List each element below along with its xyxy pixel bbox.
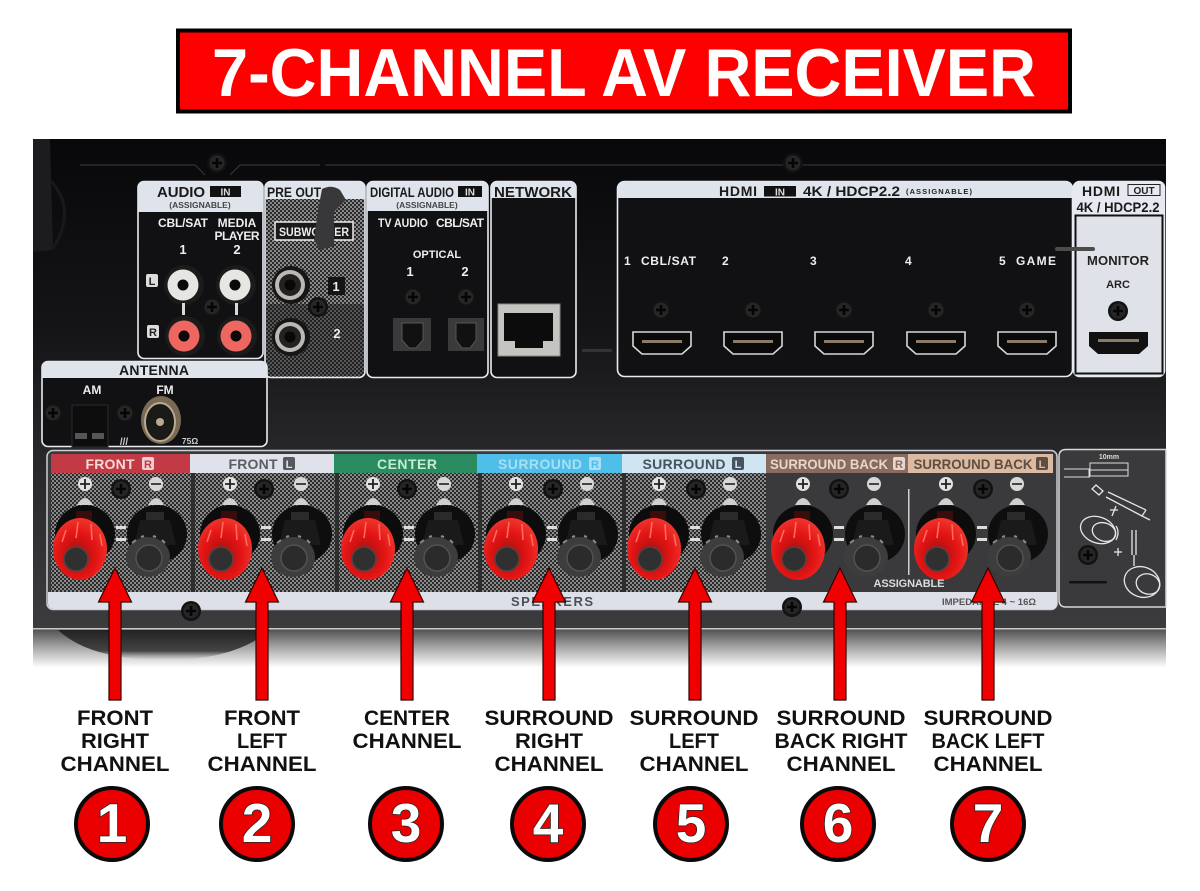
label: surround back right channel: BACK RIGHT	[774, 730, 908, 753]
badge 7: 7	[973, 792, 1003, 854]
HDMI output port	[1089, 301, 1148, 354]
heading: digital audio: (ASSIGNABLE)	[396, 200, 458, 210]
label: surround left channel: LEFT	[669, 730, 719, 753]
HDMI input labels: 5	[999, 254, 1006, 268]
channel band: front L: FRONT	[228, 456, 278, 472]
channel band: surround R: SURROUND	[498, 456, 582, 472]
label: surround back right channel: CHANNEL	[786, 753, 896, 776]
optical labels: CBL/SAT	[436, 216, 485, 230]
label: surround back right channel: SURROUND	[776, 707, 906, 730]
subwoofer jacks: 2	[333, 326, 341, 341]
panel: wiring instructions	[1059, 450, 1166, 607]
label: surround back left channel: CHANNEL	[934, 753, 1043, 776]
terminal pair 4	[484, 477, 618, 580]
title banner	[178, 30, 1070, 112]
label: front right channel	[60, 707, 170, 776]
ethernet port	[498, 304, 560, 356]
label: surround back right channel	[774, 707, 908, 776]
HDMI input ports	[633, 300, 1056, 354]
arrow 3	[390, 568, 424, 700]
input labels: PLAYER	[214, 229, 260, 243]
input labels: 2	[233, 242, 241, 257]
receiver rear panel	[33, 139, 1166, 672]
label: surround left channel: SURROUND	[630, 707, 758, 730]
badge 4: 4	[533, 792, 564, 854]
channel band: front R	[51, 454, 190, 473]
monitor label	[1087, 253, 1150, 291]
heading: digital audio: IN	[465, 188, 475, 198]
label: center channel: CENTER	[364, 707, 450, 730]
heading: digital audio: DIGITAL AUDIO	[370, 184, 454, 200]
HDMI input labels: CBL/SAT	[641, 254, 697, 268]
arrow 1	[98, 568, 132, 700]
panel: HDMI out	[1074, 182, 1164, 376]
panel: network	[491, 182, 576, 378]
channel band: center: CENTER	[377, 456, 437, 472]
arrow 6	[824, 568, 856, 700]
label: surround right channel: CHANNEL	[494, 753, 604, 776]
channel band: front L: L	[286, 459, 293, 471]
terminal pair 3	[341, 477, 475, 580]
RCA jacks	[164, 265, 257, 356]
badge 1	[76, 788, 148, 860]
lower screw right	[782, 597, 802, 617]
heading: audio in	[157, 184, 241, 210]
badge 3: 3	[391, 792, 421, 854]
top screw right	[783, 153, 803, 173]
arrow 5	[678, 568, 712, 700]
AM and FM labels: ///	[120, 437, 128, 448]
assignable label: ASSIGNABLE	[874, 578, 944, 590]
heading: digital audio	[370, 184, 482, 210]
heading: HDMI in	[719, 183, 972, 199]
AM and FM labels: FM	[156, 383, 174, 397]
channel band: surround R	[477, 454, 622, 473]
channel band: surround L: SURROUND	[642, 456, 726, 472]
label: front right channel: FRONT	[77, 707, 153, 730]
channel band: surround back L: L	[1039, 459, 1046, 471]
label: surround right channel: SURROUND	[484, 707, 614, 730]
AM and FM labels	[83, 383, 198, 448]
badge 5	[655, 788, 727, 860]
channel band: front L	[190, 454, 334, 473]
channel band: front R: FRONT	[86, 456, 135, 472]
channel band: surround back L: SURROUND BACK	[914, 456, 1032, 472]
heading: HDMI in: IN	[775, 188, 785, 198]
label: center channel	[352, 707, 462, 753]
wire length diagram	[1064, 463, 1128, 477]
optical labels: OPTICAL	[413, 249, 461, 261]
panel: antenna	[42, 362, 267, 448]
subwoofer jacks	[272, 266, 345, 356]
label: surround left channel: CHANNEL	[640, 753, 749, 776]
badge 6: 6	[823, 792, 853, 854]
badge 4	[512, 788, 584, 860]
optical ports	[393, 287, 484, 351]
terminal pair 7	[914, 477, 1048, 580]
antenna connectors	[43, 396, 181, 447]
heading: HDMI in: HDMI	[719, 183, 757, 199]
channel band: surround L	[622, 454, 766, 473]
label: surround back left channel: BACK LEFT	[932, 730, 1045, 753]
HDMI input labels: GAME	[1016, 254, 1056, 268]
label: center channel: CHANNEL	[352, 730, 462, 753]
AM and FM labels: AM	[83, 383, 101, 397]
label: surround left channel	[630, 707, 758, 776]
optical labels: TV AUDIO	[378, 216, 428, 230]
terminal pair 1	[53, 477, 187, 580]
lower screw left	[181, 601, 201, 621]
input labels: L	[149, 276, 156, 288]
subwoofer jacks: 1	[332, 279, 340, 294]
optical labels: 1	[406, 264, 414, 279]
badge 3	[370, 788, 442, 860]
heading: antenna: ANTENNA	[119, 362, 189, 378]
HDMI input labels	[624, 254, 1056, 268]
arrow 4	[532, 568, 566, 700]
heading: network: NETWORK	[494, 185, 573, 201]
HDMI input labels: 4	[905, 254, 912, 268]
HDMI input labels: 3	[810, 254, 817, 268]
heading: HDMI out	[1076, 183, 1160, 215]
cable clip	[314, 187, 346, 250]
terminal pair 5	[627, 477, 761, 580]
channel band: surround back R: R	[895, 459, 903, 471]
channel band: center	[334, 454, 477, 473]
label: front left channel	[208, 707, 317, 776]
optical labels	[378, 216, 485, 279]
panel: digital audio in	[367, 182, 488, 378]
heading: audio in: (ASSIGNABLE)	[169, 200, 231, 210]
terminal pair 2	[198, 477, 332, 580]
terminal pair 6	[771, 477, 905, 580]
input labels	[146, 216, 260, 339]
arrow 7	[972, 568, 1004, 700]
badge 2	[221, 788, 293, 860]
badge 6	[802, 788, 874, 860]
wiring steps illustration	[1077, 485, 1164, 602]
label: front left channel: LEFT	[237, 730, 287, 753]
HDMI input labels: 1	[624, 254, 631, 268]
receiver foot	[58, 630, 270, 660]
panel: audio in	[138, 182, 263, 358]
optical labels: 2	[461, 264, 469, 279]
label: surround back left channel: SURROUND	[924, 707, 1052, 730]
top screw left	[207, 153, 227, 173]
label: front right channel: CHANNEL	[60, 753, 170, 776]
heading: HDMI in: (ASSIGNABLE)	[906, 187, 972, 196]
channel band: front R: R	[144, 459, 152, 471]
input labels: MEDIA	[218, 216, 257, 230]
channel band: surround R: R	[591, 459, 599, 471]
label: surround right channel	[484, 707, 614, 776]
monitor label: ARC	[1106, 279, 1130, 291]
heading: audio in: IN	[220, 188, 230, 198]
badge 2: 2	[242, 792, 272, 854]
badge 7	[952, 788, 1024, 860]
channel band: surround L: L	[735, 459, 742, 471]
AM and FM labels: 75Ω	[182, 436, 198, 446]
floor shadow	[33, 628, 1166, 672]
arrow 2	[246, 568, 278, 700]
wire length text: 10mm	[1099, 454, 1119, 461]
label: surround back left channel	[924, 707, 1052, 776]
label: front left channel: FRONT	[224, 707, 300, 730]
badge 1: 1	[97, 792, 127, 854]
panel: pre out	[265, 182, 365, 378]
input labels: CBL/SAT	[158, 216, 209, 230]
panel: HDMI in	[618, 182, 1072, 376]
heading: HDMI in: 4K / HDCP2.2	[803, 183, 900, 199]
heading: HDMI out: OUT	[1133, 186, 1155, 197]
monitor label: MONITOR	[1087, 253, 1150, 268]
subwoofer label: SUBWOOFER	[279, 225, 349, 239]
panel: speaker terminals	[47, 450, 1057, 610]
channel band: surround back R: SURROUND BACK	[770, 456, 888, 472]
label: surround right channel: RIGHT	[515, 730, 583, 753]
impedance label: IMPEDANCE 4 ~ 16Ω	[942, 597, 1036, 608]
label: front left channel: CHANNEL	[208, 753, 317, 776]
badge 5: 5	[676, 792, 706, 854]
title text: 7-CHANNEL AV RECEIVER	[212, 35, 1036, 111]
heading: pre out: PRE OUT	[267, 184, 321, 200]
heading: HDMI out: HDMI	[1082, 183, 1120, 199]
input labels: R	[149, 327, 157, 339]
input labels: 1	[179, 242, 187, 257]
heading: HDMI out: 4K / HDCP2.2	[1076, 199, 1160, 215]
speakers label: SPEAKERS	[511, 594, 593, 609]
label: front right channel: RIGHT	[81, 730, 149, 753]
heading: audio in: AUDIO	[157, 184, 205, 201]
HDMI input labels: 2	[722, 254, 729, 268]
